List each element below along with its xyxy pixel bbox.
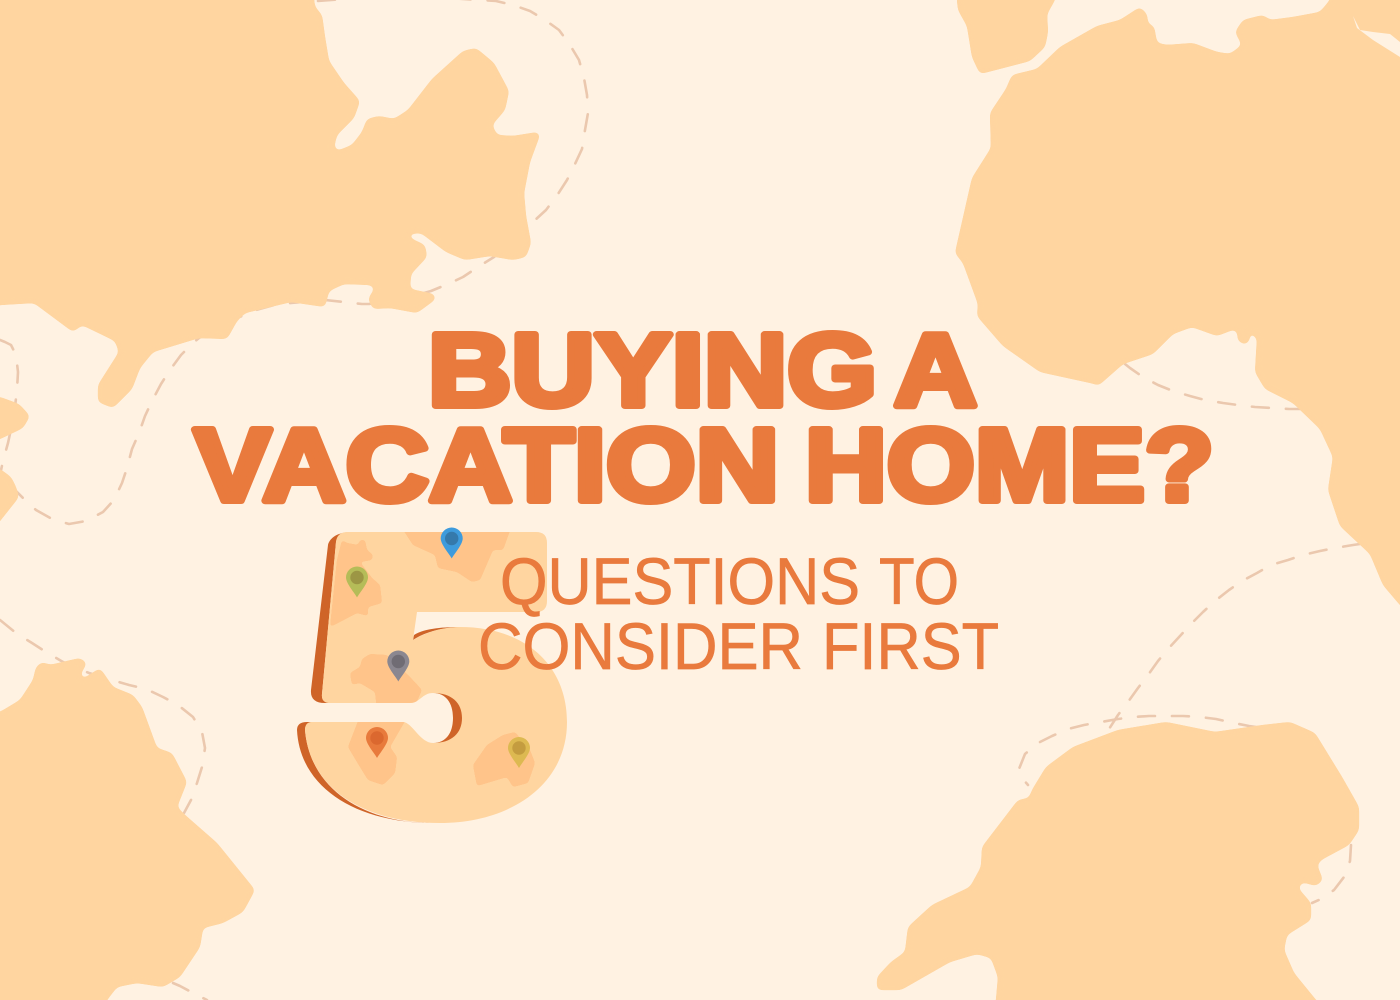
notch crescent shadow [433, 693, 462, 743]
pin: grey [387, 650, 409, 682]
title: VACATION [194, 408, 779, 522]
subtitle: FIRST [822, 609, 999, 683]
mini world map inside the 5 [330, 525, 535, 787]
number 5 dark side shadow [297, 532, 462, 823]
subtitle [478, 544, 999, 683]
pin: green [346, 566, 368, 598]
channel in the top right continent [1353, 16, 1400, 57]
title [194, 312, 1214, 522]
number 5 face [305, 532, 567, 823]
title: HOME? [805, 408, 1214, 522]
pin: yellow [508, 737, 530, 768]
subtitle: TO [879, 544, 959, 618]
pin: orange [366, 727, 388, 758]
pin: blue [441, 528, 463, 558]
title: BUYING [428, 312, 877, 428]
big number 5 with map and pins [297, 525, 567, 823]
title: A [894, 312, 977, 428]
subtitle: CONSIDER [478, 609, 803, 683]
subtitle: QUESTIONS [500, 544, 860, 618]
